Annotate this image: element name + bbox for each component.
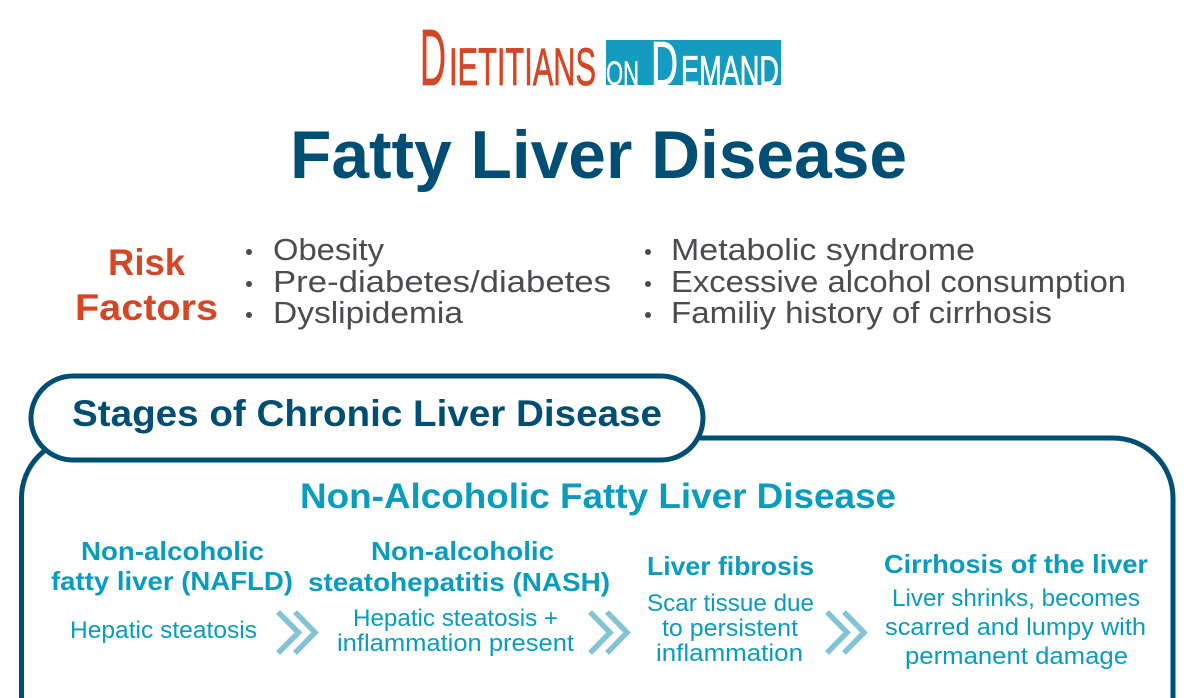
stage: NAFLD xyxy=(51,536,293,644)
stage: NASH: Hepatic steatosis + xyxy=(353,605,558,632)
risk factor list: right column xyxy=(645,232,1126,330)
title: Fatty Liver Disease xyxy=(290,117,907,193)
logo: Dietitians on Demand: ON xyxy=(606,55,639,93)
logo: Dietitians on Demand: D xyxy=(420,13,446,102)
risk factor list: right column: Familiy history of cirrhosis xyxy=(671,295,1052,330)
risk factor list: left column xyxy=(246,232,611,330)
stage: liver fibrosis: Liver fibrosis xyxy=(647,551,814,581)
panel: stages outline xyxy=(22,438,1173,698)
logo: Dietitians on Demand: EMAND xyxy=(681,47,779,94)
stage: cirrhosis of the liver: permanent damage xyxy=(905,643,1128,670)
stage: liver fibrosis: inflammation xyxy=(656,640,803,667)
stage: NASH: steatohepatitis (NASH) xyxy=(308,567,610,597)
heading pill: stages of chronic liver disease xyxy=(31,376,703,460)
heading: risk factors xyxy=(75,242,218,328)
subheading: non-alcoholic fatty liver disease: Non-Alcoholic Fatty Liver Disease xyxy=(300,477,896,516)
risk factor list: right column: Excessive alcohol consumption xyxy=(671,264,1126,299)
heading pill: stages of chronic liver disease: Stages of Chronic Liver Disease xyxy=(72,393,662,434)
stage: cirrhosis of the liver xyxy=(884,549,1148,670)
arrow: NASH to fibrosis xyxy=(590,612,627,653)
heading: risk factors: Risk xyxy=(108,242,185,283)
stage: NASH: inflammation present xyxy=(337,630,574,657)
stage: NASH xyxy=(308,536,610,657)
logo: Dietitians on Demand: D xyxy=(651,30,678,99)
stage: NASH: Non-alcoholic xyxy=(371,536,554,566)
stage: liver fibrosis xyxy=(647,551,814,667)
heading: risk factors: Factors xyxy=(75,287,218,328)
stage: cirrhosis of the liver: scarred and lumpy with xyxy=(885,614,1146,641)
stage: NAFLD: fatty liver (NAFLD) xyxy=(51,566,293,596)
stage: NAFLD: Hepatic steatosis xyxy=(70,617,257,644)
risk factor list: left column: Obesity xyxy=(273,232,385,267)
stage: liver fibrosis: Scar tissue due xyxy=(647,590,814,617)
risk factor list: left column: Dyslipidemia xyxy=(273,295,464,330)
stage: cirrhosis of the liver: Cirrhosis of the liver xyxy=(884,549,1148,579)
logo: Dietitians on Demand xyxy=(420,13,781,102)
arrow: fibrosis to cirrhosis xyxy=(827,612,864,653)
risk factor list: left column: Pre-diabetes/diabetes xyxy=(273,264,611,299)
stage: cirrhosis of the liver: Liver shrinks, becomes xyxy=(892,585,1140,612)
stage: liver fibrosis: to persistent xyxy=(662,615,798,642)
logo: Dietitians on Demand: IETITIANS xyxy=(449,38,596,97)
arrow: NAFLD to NASH xyxy=(278,612,315,653)
risk factor list: right column: Metabolic syndrome xyxy=(671,232,975,267)
stage: NAFLD: Non-alcoholic xyxy=(81,536,264,566)
